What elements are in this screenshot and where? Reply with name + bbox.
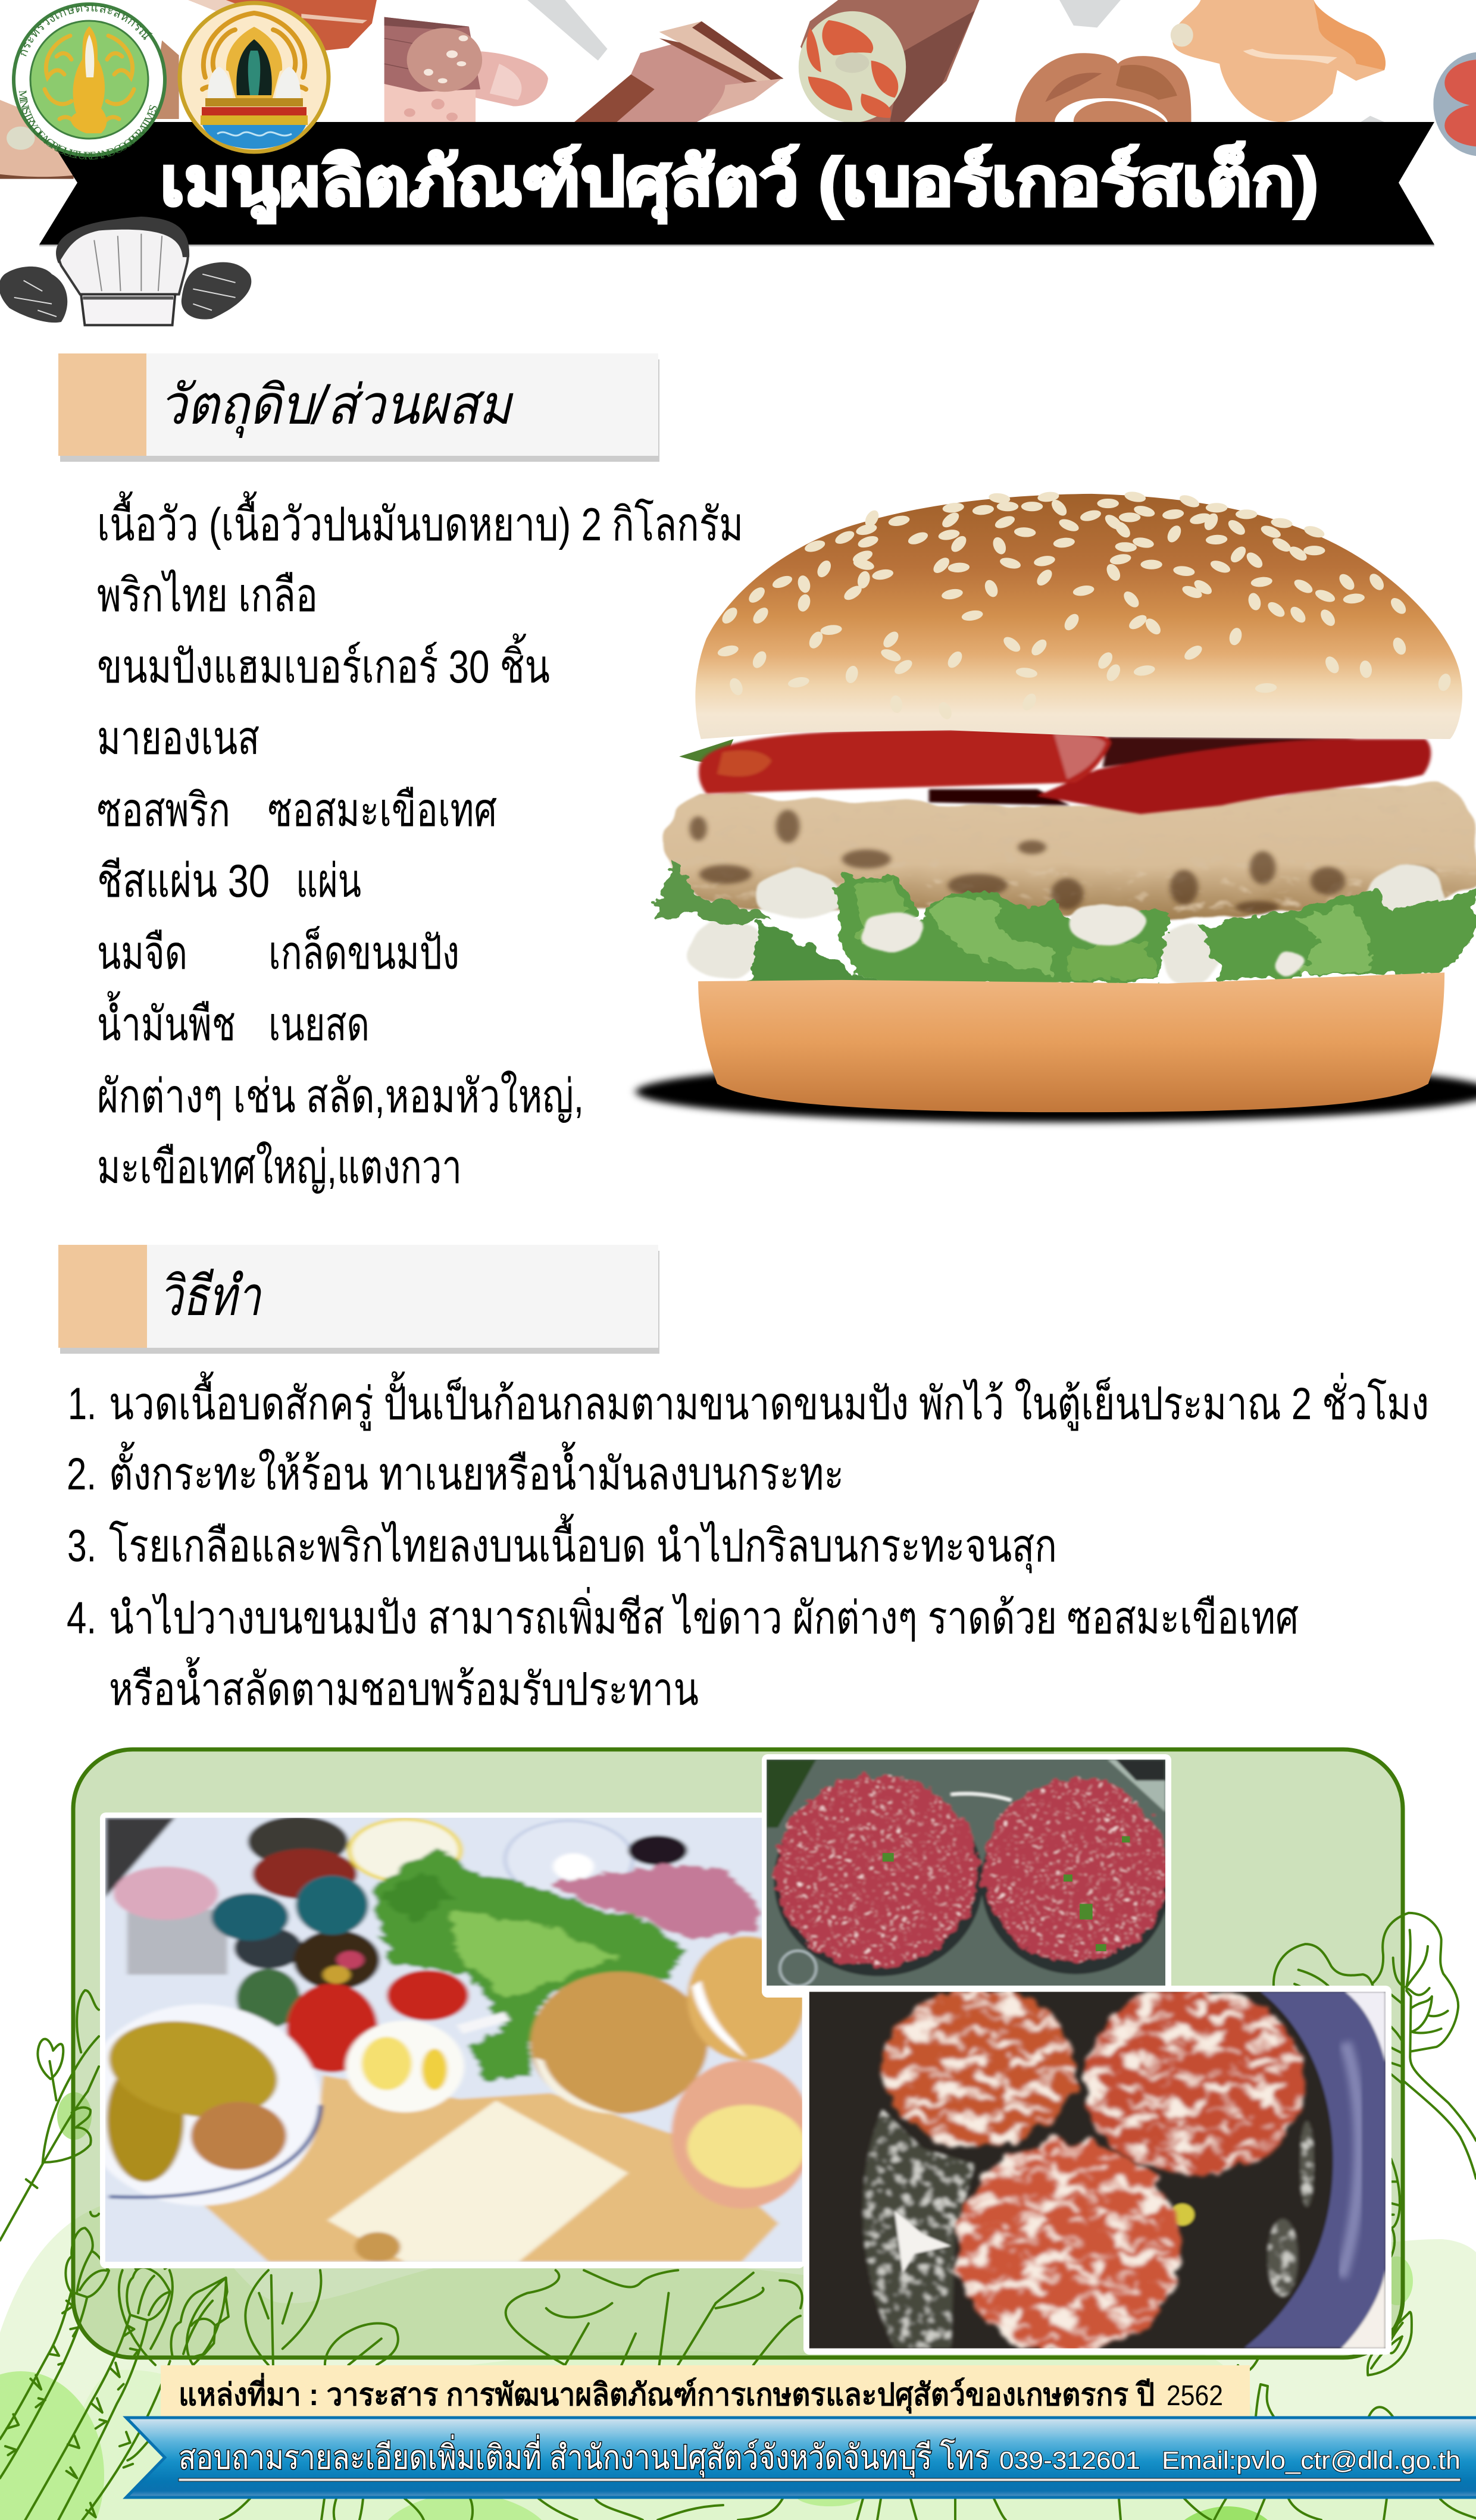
section heading: ingredients: [58, 353, 659, 462]
glass bowl: [505, 1821, 633, 1898]
ingredients list: น้ำมันพืช: [97, 991, 236, 1050]
burger shadow: [636, 1061, 1476, 1122]
ingredients list: เกล็ดขนมปัง: [268, 926, 459, 979]
section heading: method: [58, 1245, 659, 1354]
photo background table: [105, 1817, 802, 2262]
burger small leaf: [679, 739, 733, 765]
burger tomatoes: [699, 728, 1431, 814]
ingredients list: ขนมปังแฮมเบอร์เกอร์ 30 ชิ้น: [97, 633, 550, 693]
leaf: right of strip: [1238, 2358, 1393, 2416]
leaf: asparagus stalk C: [82, 2361, 170, 2520]
ingredients list: [97, 491, 743, 1194]
leaf: right half oval: [1391, 2159, 1400, 2256]
source strip: แหล่งที่มา : วาระสาร การพัฒนาผลิตภัณฑ์การเกษตรและปศุสัตว์ของเกษตรกร ปี: [179, 2373, 1155, 2414]
cheese slice: [327, 2100, 628, 2262]
background hills: [0, 2092, 1476, 2520]
leaf: asparagus head B: [127, 2262, 176, 2320]
illustration: salami: [384, 17, 548, 122]
burger lettuce: [652, 859, 1476, 988]
olive: [628, 1836, 687, 1865]
source strip: 2562: [1167, 2380, 1223, 2412]
oil patches: [863, 2109, 975, 2349]
illustration: red meat: [188, 0, 377, 51]
ribbon phone: 039-312601: [999, 2446, 1140, 2474]
ingredients list: ซอสพริก: [97, 784, 230, 836]
leaf: asparagus stalk B: [25, 2315, 148, 2520]
section heading: ingredients: วัตถุดิบ/ส่วนผสม: [159, 375, 514, 438]
potatoes and egg: [107, 2058, 184, 2182]
leaf: right left spinach: [1274, 1944, 1373, 1991]
illustration: bacon: [574, 21, 783, 122]
minced meat: [551, 1865, 758, 1939]
method steps: โรยเกลือและพริกไทยลงบนเนื้อบด นำไปกริลบนกระทะจนสุก: [109, 1513, 1057, 1573]
lemon cup: [349, 1819, 461, 1882]
method steps: [67, 1371, 1429, 1715]
logo: ministry of agriculture: กระทรวงเกษตรและสหกรณ์: [20, 5, 152, 57]
leaf outlines: below ribbon and right of strip: [220, 2358, 1476, 2520]
ingredients list: เนื้อวัว (เนื้อวัวปนมันบดหยาบ) 2 กิโลกรัม: [97, 491, 743, 550]
ingredients list: มะเขือเทศใหญ่,แตงกวา: [97, 1141, 462, 1194]
tomatoes: [387, 1970, 469, 2021]
burger photo: [636, 490, 1476, 1122]
illustration: left meat: [0, 40, 179, 179]
butter bowl: [459, 2016, 508, 2030]
icon: chef hat with steaks: [0, 217, 251, 325]
lilac jar: [127, 1909, 227, 1975]
leaf: asparagus head C: [171, 2278, 229, 2358]
burger sesame seeds: [716, 490, 1452, 721]
leaf: spinach stems under panel: [119, 2270, 226, 2365]
ingredients list: นมจืด: [97, 926, 187, 979]
method steps: 3.: [67, 1521, 96, 1572]
leaf: spinach one: [245, 2270, 398, 2365]
leaf: right top spinach: [1373, 1913, 1476, 2178]
method steps: หรือน้ำสลัดตามชอบพร้อมรับประทาน: [109, 1657, 699, 1715]
illustration: chicken: [1171, 0, 1386, 122]
photo: raw patties: [762, 1749, 1172, 1998]
leaf: right bottom small leaf: [1368, 2312, 1412, 2375]
leaf outlines: left stalks and sprig: [0, 1990, 229, 2520]
burger patty: [664, 782, 1476, 918]
burger grill marks: [690, 810, 1434, 913]
leaf: spinach two: [506, 2270, 802, 2365]
pink bowl: [671, 2061, 812, 2208]
illustration: steak: [799, 0, 980, 123]
burger mayo under lettuce: [687, 865, 1446, 984]
top food illustrations: [0, 0, 1476, 179]
icon: right steak: [182, 262, 251, 320]
ingredients list: เนยสด: [268, 998, 370, 1050]
leaf outlines: bottom spinach: [119, 2270, 802, 2365]
pan rim: [1244, 1992, 1386, 2347]
ribbon underline: [179, 2478, 1461, 2481]
method steps: 4.: [67, 1593, 96, 1644]
burger mayo on lettuce: [859, 904, 1301, 974]
leaf: asparagus stalk A: [0, 2292, 87, 2478]
photo panel background: [73, 1749, 1403, 2358]
burger bun: [530, 1972, 708, 2114]
ingredients list: พริกไทย เกลือ: [97, 569, 318, 621]
illustration: sausage: [1015, 53, 1192, 122]
leaf: stems at bottom: [220, 2499, 1476, 2520]
illustration: knives faint: [527, 0, 1384, 122]
lettuce: [373, 1848, 683, 2081]
logo: department of livestock: [180, 3, 329, 152]
teal jars: [234, 1927, 302, 1969]
method steps: 1.: [68, 1379, 96, 1429]
ingredients list: ชีสแผ่น 30: [97, 854, 270, 907]
ribbon text: สอบถามรายละเอียดเพิ่มเติมที่ สำนักงานปศุสัตว์จังหวัดจันทบุรี โทร: [179, 2434, 990, 2478]
leaf: heart sprig: [0, 1990, 99, 2240]
pan interior: [802, 1984, 1397, 2359]
title banner: [39, 122, 1434, 246]
burger bottom bun: [698, 972, 1444, 1112]
title text: เมนูผลิตภัณฑ์ปศุสัตว์ (เบอร์เกอร์สเต็ก): [160, 142, 1318, 224]
cooked patties: [883, 1988, 1075, 2148]
second bun: [687, 1936, 806, 2061]
ribbon email: Email:pvlo_ctr@dld.go.th: [1162, 2446, 1461, 2474]
icon: left steak: [0, 267, 67, 323]
section heading: method: วิธีทำ: [159, 1266, 262, 1327]
logo: ministry of agriculture: [12, 2, 167, 159]
ingredients list: ผักต่างๆ เช่น สลัด,หอมหัวใหญ่,: [97, 1070, 584, 1123]
source strip: [161, 2365, 1250, 2416]
method steps: ตั้งกระทะให้ร้อน ทาเนยหรือน้ำมันลงบนกระทะ: [109, 1441, 844, 1500]
method steps: 2.: [67, 1449, 96, 1500]
illustration: far right steak: [1433, 52, 1476, 156]
dark jar: [248, 1816, 348, 1867]
ingredients list: แผ่น: [296, 854, 361, 907]
logo: ministry of agriculture: MINISTRY OF AGRICULTURE AND COOPERATIVES: [19, 90, 157, 159]
ingredients list: ซอสมะเขือเทศ: [268, 784, 497, 836]
ingredients list: มายองเนส: [97, 712, 259, 764]
contact ribbon: [126, 2418, 1476, 2497]
burger top bun: [695, 494, 1462, 739]
leaf: asparagus head A: [65, 2212, 109, 2297]
photo: patties frying in pan: [802, 1984, 1397, 2359]
icon: chef hat: [56, 217, 189, 325]
photo: ingredients: [79, 1809, 824, 2283]
wooden board: [205, 2076, 778, 2262]
plate: [79, 2004, 321, 2206]
leaf outlines: right plant: [1274, 1913, 1476, 2375]
